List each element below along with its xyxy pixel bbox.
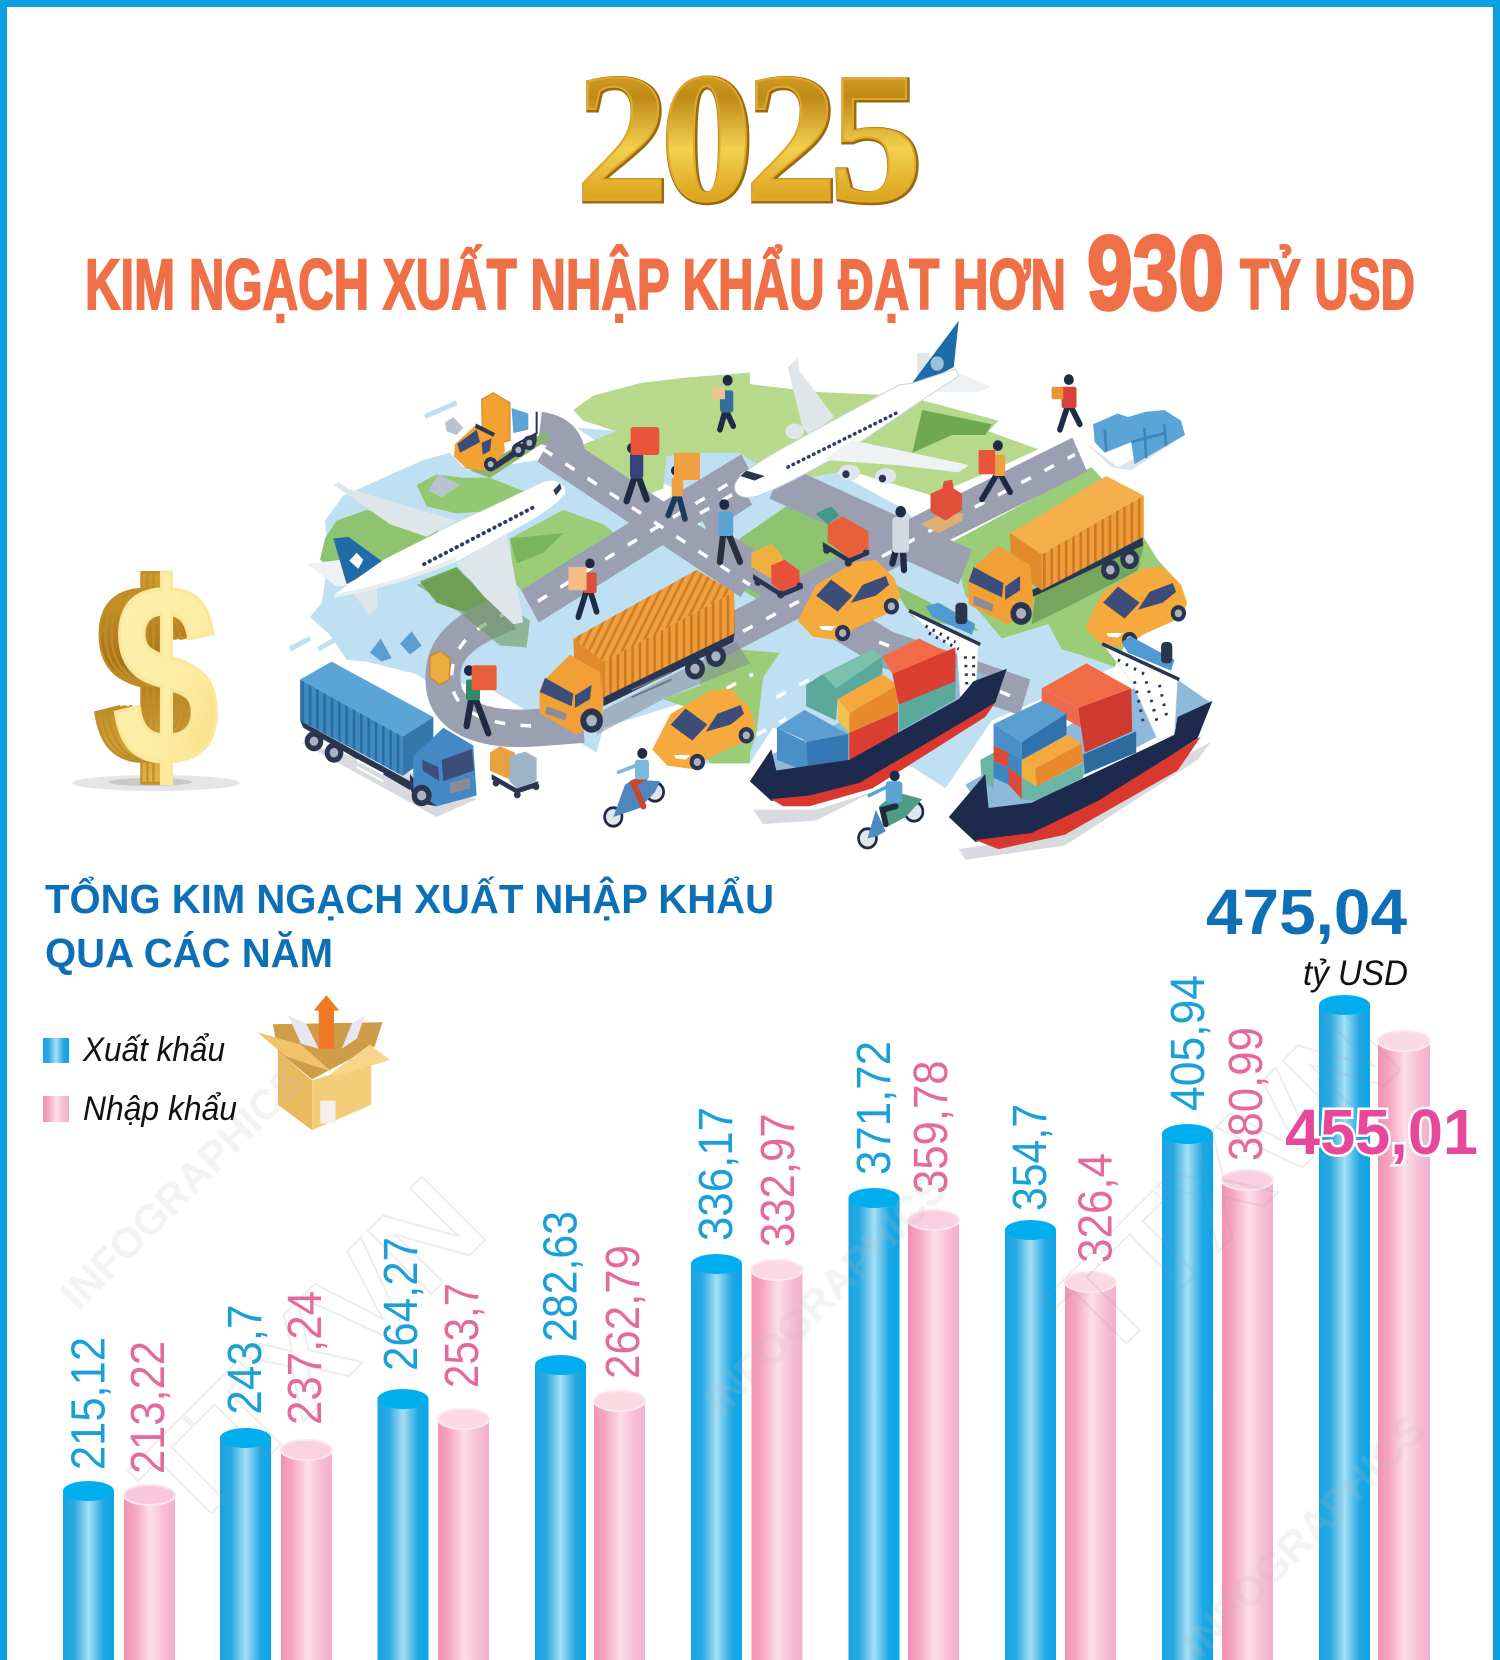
title (85, 215, 1415, 332)
bars 5: 332,97 (752, 1114, 805, 1247)
blue cargo bundle (1085, 410, 1185, 471)
callout: export value 475,04 billion USD (1206, 876, 1408, 993)
bars 2 (219, 1291, 332, 1660)
motorbikes with riders (605, 748, 923, 848)
luggage carts (490, 480, 964, 798)
icon: gold dollar sign (72, 532, 240, 820)
bars 7: 326,4 (1070, 1153, 1122, 1263)
bars 6: 371,72 (848, 1041, 901, 1175)
icon: gold dollar sign: $ (99, 532, 205, 820)
bars 1 (63, 1337, 175, 1660)
watermark: TTXVN (107, 1150, 511, 1555)
map details: rocks and markers (290, 403, 463, 685)
world map: land (320, 372, 1178, 763)
heading: total trade by year (45, 875, 774, 976)
heading: total trade by year: QUA CÁC NĂM (45, 930, 333, 976)
year 2025 in gold: 2025 (576, 36, 922, 241)
airplane left (307, 481, 565, 647)
orange container truck right (968, 476, 1144, 625)
title: 930 (1087, 215, 1224, 332)
world map: water (310, 428, 1121, 788)
title: TỶ USD (1240, 246, 1415, 325)
bars 1: 213,22 (122, 1341, 175, 1474)
container ship right (949, 637, 1212, 860)
callout: import value 455,01: 455,01 (1285, 1096, 1478, 1168)
watermark: INFOGRAPHICS (51, 1057, 312, 1318)
bars 3 (375, 1237, 489, 1660)
title: KIM NGẠCH XUẤT NHẬP KHẨU ĐẠT HƠN (85, 245, 1066, 325)
year 2025 in gold: 2025 (577, 37, 923, 242)
bars 2: 237,24 (279, 1291, 332, 1425)
icon: cardboard box with export arrow (258, 995, 390, 1130)
watermark (51, 980, 1434, 1660)
bars 8: 405,94 (1162, 975, 1215, 1111)
bars 1: 215,12 (63, 1337, 116, 1470)
watermark: INFOGRAPHICS (695, 1163, 956, 1424)
bars 7: 354,7 (1004, 1104, 1057, 1211)
bars 9 (1319, 995, 1430, 1660)
bars 4: 262,79 (597, 1245, 650, 1379)
watermark: TTXVN (1022, 980, 1426, 1385)
bars 3: 264,27 (375, 1237, 428, 1371)
bars 8: 380,99 (1220, 1027, 1273, 1161)
small truck with cargo (454, 393, 550, 478)
icon: gold dollar sign: $ (105, 532, 211, 820)
blue container truck (300, 662, 477, 817)
bar chart: exports and imports by year (63, 975, 1430, 1660)
bars 4: 282,63 (534, 1211, 588, 1342)
legend: Nhập khẩu (83, 1090, 237, 1128)
icon: gold dollar sign: $ (113, 532, 219, 820)
icon: gold dollar sign: $ (93, 532, 199, 820)
bars 6 (848, 1041, 959, 1660)
watermark: INFOGRAPHICS (1173, 1405, 1434, 1660)
callout: export value 475,04 billion USD: tỷ USD (1303, 954, 1408, 993)
callout: export value 475,04 billion USD: 475,04 (1206, 876, 1407, 948)
heading: total trade by year: TỔNG KIM NGẠCH XUẤT NHẬP KHẨU (45, 875, 774, 922)
orange container truck centre (539, 570, 750, 735)
roads (443, 428, 1080, 735)
legend (43, 1031, 237, 1128)
bars 5 (690, 1107, 805, 1660)
bars 7 (1004, 1104, 1122, 1660)
bars 3: 253,7 (436, 1283, 489, 1388)
legend: Xuất khẩu (82, 1031, 225, 1069)
illustration: global logistics map (290, 321, 1212, 860)
car centre (798, 560, 900, 641)
car right (1085, 567, 1187, 648)
bars 5: 336,17 (690, 1107, 743, 1241)
airplane right (735, 321, 992, 497)
car lower left (652, 689, 755, 770)
people carrying boxes (464, 374, 1080, 733)
bars 8 (1162, 975, 1273, 1660)
bars 2: 243,7 (219, 1305, 272, 1415)
bars 6: 359,78 (905, 1060, 958, 1194)
bars 4 (534, 1211, 650, 1660)
container ship left (750, 603, 1007, 824)
